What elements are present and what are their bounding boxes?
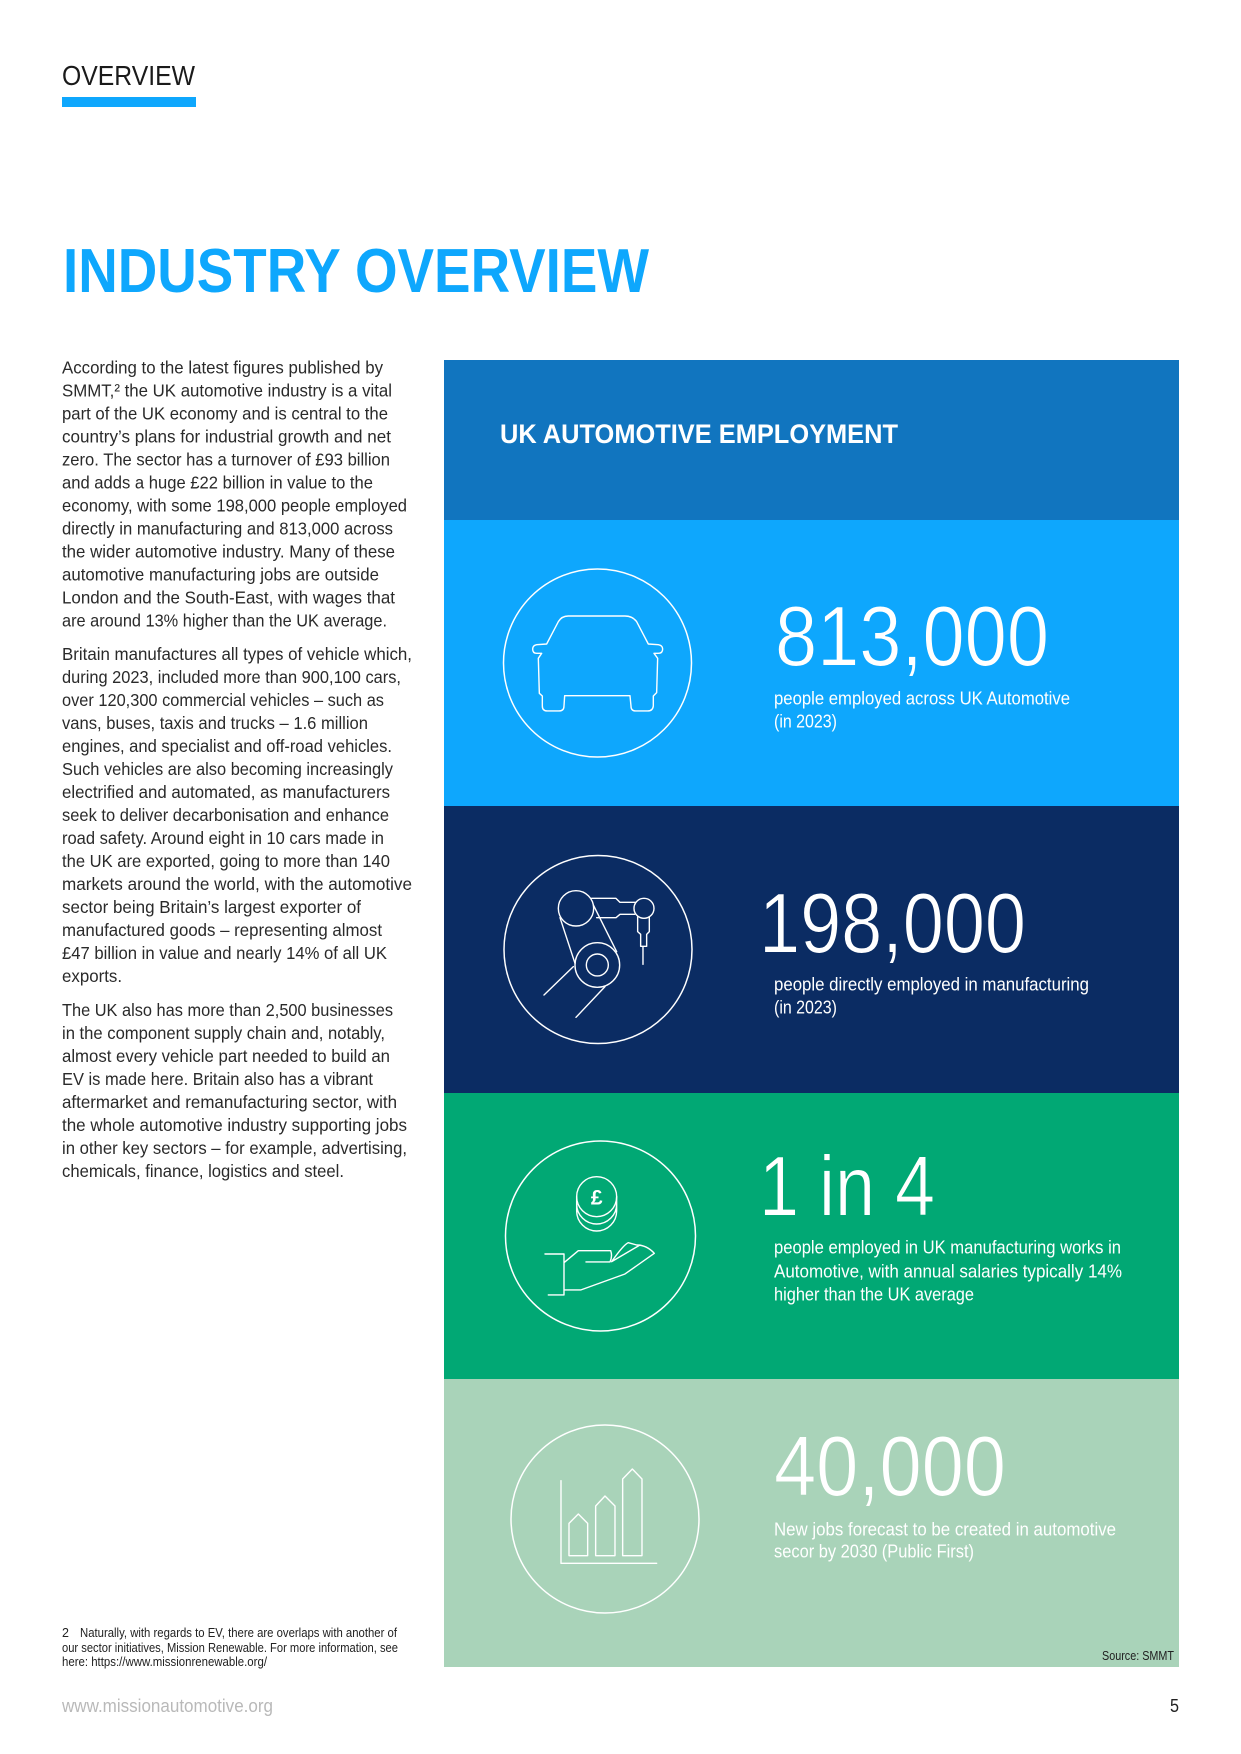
text block: supply chain paragraph: The UK also has more than 2,500 businesses — [62, 1000, 393, 1020]
panel: 1 in 4 — [444, 1093, 1179, 1379]
text block: supply chain paragraph: in the component supply chain and, notably, — [62, 1023, 385, 1043]
text block: intro paragraph: are around 13% higher than the UK average. — [62, 610, 387, 630]
number: 1 in 4 — [759, 1140, 935, 1234]
description: people directly employed in manufacturing — [774, 974, 1089, 994]
text block: vehicles paragraph: vans, buses, taxis and trucks – 1.6 million — [62, 713, 368, 733]
text block: vehicles paragraph: manufactured goods – representing almost — [62, 920, 382, 940]
text block: intro paragraph: zero. The sector has a turnover of £93 billion — [62, 450, 390, 470]
description — [774, 1238, 1122, 1304]
footnote: here: https://www.missionrenewable.org/ — [62, 1655, 267, 1669]
text block: vehicles paragraph: Such vehicles are also becoming increasingly — [62, 759, 393, 779]
description: (in 2023) — [774, 712, 837, 732]
description — [774, 1520, 1116, 1562]
panel heading: UK AUTOMOTIVE EMPLOYMENT — [500, 419, 898, 449]
footer website: www.missionautomotive.org — [61, 1695, 273, 1716]
icon: coins over hand: £ — [591, 1186, 603, 1210]
title: INDUSTRY OVERVIEW — [63, 237, 649, 306]
text block: vehicles paragraph: markets around the world, with the automotive — [62, 874, 412, 894]
section label — [62, 60, 196, 107]
text block: intro paragraph: London and the South-East, with wages that — [62, 588, 395, 608]
text block: intro paragraph: the wider automotive industry. Many of these — [62, 542, 395, 562]
footnote — [62, 1626, 398, 1669]
text block: vehicles paragraph: the UK are exported, going to more than 140 — [62, 851, 390, 871]
text block: vehicles paragraph: seek to deliver decarbonisation and enhance — [62, 805, 389, 825]
text block: supply chain paragraph: the whole automotive industry supporting jobs — [62, 1115, 407, 1135]
text block: vehicles paragraph: road safety. Around eight in 10 cars made in — [62, 828, 384, 848]
text block: supply chain paragraph: almost every vehicle part needed to build an — [62, 1046, 390, 1066]
text block: supply chain paragraph: EV is made here. Britain also has a vibrant — [62, 1069, 373, 1089]
page number: 5 — [1170, 1696, 1179, 1716]
description: people employed across UK Automotive — [774, 688, 1070, 708]
text block: vehicles paragraph: Britain manufactures all types of vehicle which, — [62, 644, 412, 664]
text block: vehicles paragraph — [62, 644, 412, 986]
text block: intro paragraph: part of the UK economy and is central to the — [62, 404, 388, 424]
text block: intro paragraph: directly in manufacturing and 813,000 across — [62, 518, 393, 538]
text block: supply chain paragraph: in other key sectors – for example, advertising, — [62, 1138, 407, 1158]
text block: supply chain paragraph: chemicals, finance, logistics and steel. — [62, 1161, 344, 1181]
text block: intro paragraph: economy, with some 198,000 people employed — [62, 496, 407, 516]
text block: intro paragraph: country’s plans for industrial growth and net — [62, 426, 391, 446]
number: 40,000 — [774, 1420, 1006, 1514]
description: secor by 2030 (Public First) — [774, 1542, 974, 1562]
text block: intro paragraph — [62, 358, 407, 630]
number: 813,000 — [775, 590, 1049, 684]
text block: vehicles paragraph: £47 billion in value and nearly 14% of all UK — [62, 943, 387, 963]
text block: intro paragraph: According to the latest figures published by — [62, 358, 383, 378]
text block: intro paragraph: and adds a huge £22 billion in value to the — [62, 472, 373, 492]
number: 198,000 — [759, 876, 1026, 972]
panel: 198,000 manufacturing — [444, 806, 1179, 1093]
text block: supply chain paragraph: aftermarket and remanufacturing sector, with — [62, 1092, 397, 1112]
footnote: our sector initiatives, Mission Renewable. For more information, see — [62, 1641, 398, 1655]
text block: supply chain paragraph — [62, 1000, 407, 1181]
footnote: Naturally, with regards to EV, there are overlaps with another of — [80, 1626, 397, 1640]
section label: OVERVIEW — [62, 60, 196, 91]
panel: 813,000 employed — [444, 520, 1179, 806]
description — [774, 688, 1070, 732]
description: people employed in UK manufacturing works in — [774, 1238, 1121, 1258]
text block: vehicles paragraph: during 2023, included more than 900,100 cars, — [62, 667, 401, 687]
description: New jobs forecast to be created in automotive — [774, 1520, 1116, 1540]
text block: vehicles paragraph: electrified and automated, as manufacturers — [62, 782, 390, 802]
description: (in 2023) — [774, 998, 837, 1018]
source note: Source: SMMT — [1102, 1648, 1174, 1663]
icon: coins over hand — [506, 1141, 696, 1331]
icon: robot arm — [504, 856, 692, 1044]
description: Automotive, with annual salaries typically 14% — [774, 1262, 1122, 1282]
text block: intro paragraph: automotive manufacturing jobs are outside — [62, 564, 379, 584]
text block: vehicles paragraph: over 120,300 commercial vehicles – such as — [62, 690, 384, 710]
text block: vehicles paragraph: engines, and specialist and off-road vehicles. — [62, 736, 392, 756]
icon: bar chart — [511, 1425, 699, 1613]
description — [774, 974, 1089, 1018]
text block: intro paragraph: SMMT,² the UK automotive industry is a vital — [62, 380, 392, 400]
panel: 40,000 new jobs — [444, 1379, 1179, 1667]
panel: employment header — [444, 360, 1179, 520]
text block: vehicles paragraph: sector being Britain’s largest exporter of — [62, 897, 361, 917]
text block: vehicles paragraph: exports. — [62, 966, 122, 986]
footnote: 2 — [62, 1626, 69, 1640]
description: higher than the UK average — [774, 1284, 974, 1304]
icon: car — [504, 569, 692, 757]
